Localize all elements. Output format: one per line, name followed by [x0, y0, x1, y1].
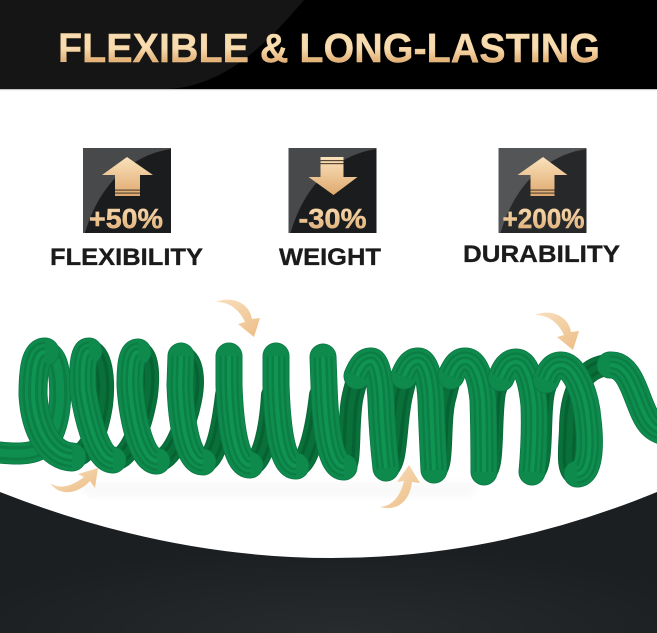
icon: up arrow +200%: +200% — [502, 203, 585, 234]
arrow: bottom left — [50, 468, 98, 492]
label: durability: DURABILITY — [463, 241, 620, 268]
stat: flexibility — [50, 148, 203, 271]
label: weight: WEIGHT — [279, 244, 381, 271]
coil floor shadow — [70, 482, 480, 497]
arrow: bottom centre — [380, 465, 420, 508]
stat: weight — [279, 148, 381, 271]
header banner — [0, 0, 657, 90]
title: FLEXIBLE & LONG-LASTING — [58, 25, 600, 71]
icon: up arrow +50% — [83, 148, 171, 234]
arrow: top left — [216, 300, 260, 337]
green coiled hose — [0, 351, 657, 474]
stat: durability — [463, 148, 620, 268]
icon: up arrow +50%: +50% — [89, 203, 163, 234]
arrow: top right — [535, 313, 579, 350]
dark curved footer — [0, 492, 657, 633]
icon: up arrow +200% — [498, 148, 586, 234]
label: flexibility: FLEXIBILITY — [50, 244, 203, 271]
icon: down arrow -30%: -30% — [298, 203, 367, 234]
